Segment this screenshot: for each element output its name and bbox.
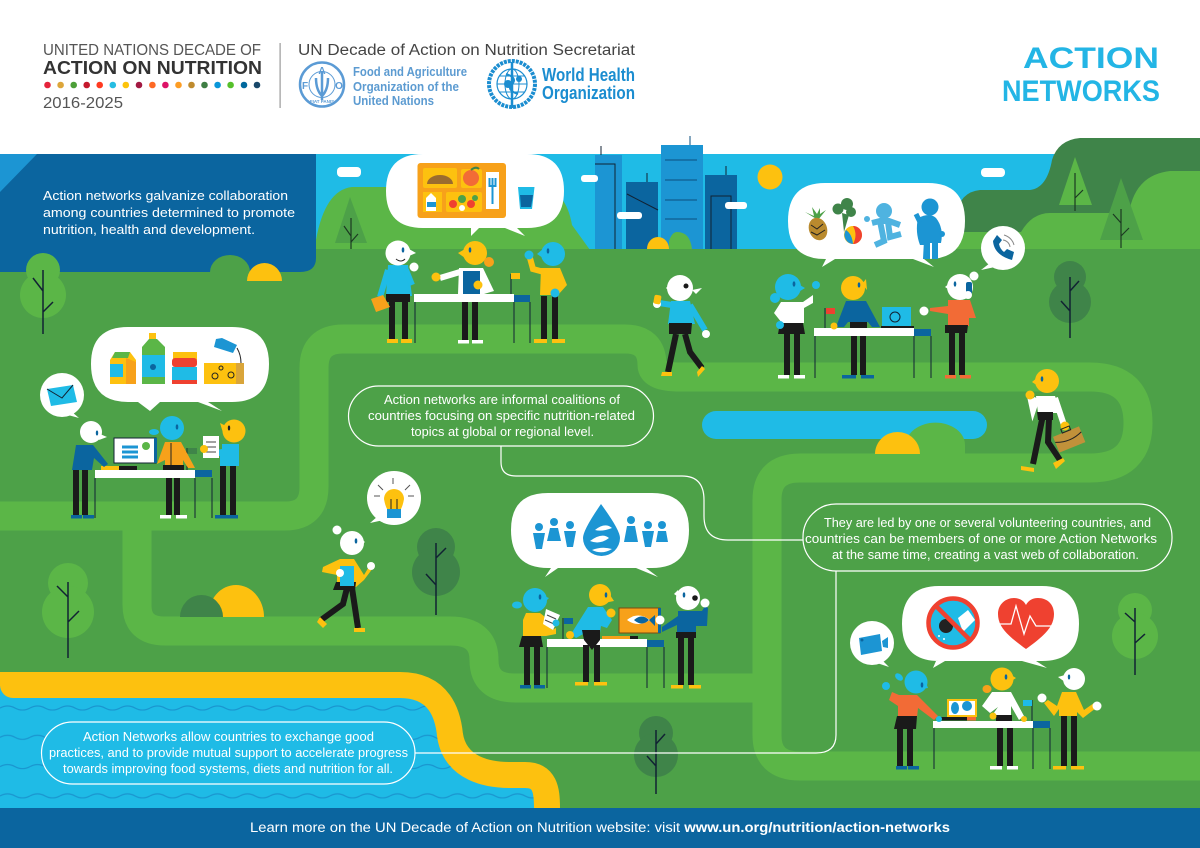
callout: informal coalitions: Action networks are informal coalitions of bbox=[384, 393, 621, 407]
hills bbox=[316, 138, 1200, 250]
FAO name bbox=[353, 65, 467, 108]
intro text: nutrition, health and development. bbox=[43, 222, 255, 237]
WHO name: World Health bbox=[542, 65, 635, 85]
intro text bbox=[43, 188, 295, 237]
river waves bbox=[0, 705, 534, 798]
FAO logo: O bbox=[335, 81, 343, 92]
callout: exchange good practices: practices, and to provide mutual support to accelerate progress bbox=[49, 745, 408, 760]
table and monitor bbox=[547, 608, 664, 688]
header: UN Decade logo bbox=[43, 42, 262, 112]
FAO name: Food and Agriculture bbox=[353, 65, 467, 79]
FAO logo: A bbox=[318, 66, 326, 77]
figure: blue head, orange shirt bbox=[882, 670, 942, 770]
speech bubble: phone call bbox=[981, 226, 1025, 270]
callout connectors bbox=[415, 446, 836, 753]
figure: yellow head, cyan shirt bbox=[200, 420, 246, 518]
callout: led by volunteering countries: countries can be members of one or more Action Networks bbox=[805, 532, 1157, 546]
round trees bbox=[20, 253, 1158, 794]
figure: blue head, yellow shirt, with paper bbox=[512, 588, 560, 688]
callout: informal coalitions: topics at global or regional level. bbox=[411, 425, 594, 439]
figure: white head, blue shirt bbox=[656, 586, 710, 688]
scene: water and fish bbox=[511, 493, 710, 688]
pond bbox=[702, 411, 987, 439]
speech bubble: email bbox=[40, 373, 84, 418]
speech bubble: lunch tray bbox=[386, 154, 564, 236]
FAO logo bbox=[300, 62, 344, 106]
WHO name: Organization bbox=[542, 83, 635, 103]
callout: led by volunteering countries: at the same time, creating a vast web of collaboration. bbox=[832, 548, 1139, 562]
panel corner bbox=[0, 154, 37, 192]
callout: led by volunteering countries: They are led by one or several volunteering countries, and bbox=[824, 516, 1151, 530]
FAO logo: F bbox=[302, 81, 308, 92]
intro text: Action networks galvanize collaboration bbox=[43, 188, 288, 203]
header: UN Decade logo: ACTION ON NUTRITION bbox=[43, 58, 262, 78]
scene: school lunch bbox=[371, 154, 567, 344]
figure: yellow head, white shirt bbox=[432, 241, 494, 344]
figure: walker with briefcase bbox=[1021, 369, 1085, 472]
speech bubble: video call bbox=[850, 621, 894, 667]
pine trees bbox=[335, 157, 1143, 250]
WHO logo bbox=[489, 61, 535, 108]
sun bbox=[758, 164, 782, 190]
sky bbox=[0, 154, 1200, 254]
speech bubble: packaged foods bbox=[91, 327, 269, 411]
bushes bbox=[180, 255, 965, 617]
title: ACTION bbox=[1023, 42, 1159, 75]
header: UN Decade logo: 2016-2025 bbox=[43, 95, 123, 112]
secretariat heading: UN Decade of Action on Nutrition Secretariat bbox=[298, 42, 636, 59]
speech bubble: lightbulb bbox=[367, 471, 421, 525]
scene: healthy diet and exercise bbox=[770, 183, 1025, 378]
figure: blue head, yellow shirt bbox=[524, 242, 567, 343]
speech bubble: water and people bbox=[511, 493, 689, 577]
winding paths bbox=[0, 339, 1200, 766]
title: NETWORKS bbox=[1002, 75, 1160, 108]
title bbox=[1002, 42, 1160, 108]
river water bbox=[0, 680, 547, 808]
table and monitor bbox=[95, 438, 212, 518]
figure: white head, yellow shirt bbox=[1038, 668, 1102, 770]
table and laptop bbox=[814, 307, 931, 378]
figure: white head, blue sweater bbox=[71, 421, 108, 518]
figure: walker with lightbulb idea bbox=[317, 471, 421, 632]
callout: informal coalitions bbox=[348, 386, 654, 446]
callout: exchange good practices: Action Networks allow countries to exchange good bbox=[83, 729, 374, 744]
footer band bbox=[0, 808, 1200, 848]
callout: informal coalitions: countries focusing on specific nutrition-related bbox=[368, 409, 635, 423]
ground bbox=[0, 249, 1200, 808]
figure: yellow head, cyan shirt bbox=[566, 584, 616, 686]
sandy bank bbox=[0, 672, 547, 808]
figure: blue head, white shirt bbox=[770, 274, 820, 378]
footer text: Learn more on the UN Decade of Action on Nutrition website: visit www.un.org/nutrition/action-networks bbox=[250, 820, 950, 835]
clouds bbox=[337, 167, 1005, 219]
buildings bbox=[595, 136, 737, 249]
figure: yellow head, white shirt bbox=[982, 668, 1027, 770]
table bbox=[414, 273, 530, 343]
header: UN Decade logo: UNITED NATIONS DECADE OF bbox=[43, 42, 261, 59]
intro text: among countries determined to promote bbox=[43, 205, 295, 220]
WHO name bbox=[542, 65, 635, 103]
FAO logo: FIAT PANIS bbox=[310, 99, 334, 104]
figure: walker with phone bbox=[653, 275, 710, 377]
callout: led by volunteering countries bbox=[803, 504, 1172, 571]
callout: exchange good practices: towards improving food systems, diets and nutrition for all. bbox=[63, 761, 393, 776]
FAO name: Organization of the bbox=[353, 80, 459, 94]
table and laptop bbox=[933, 699, 1050, 769]
scene: food labelling bbox=[40, 327, 269, 518]
dark blue intro panel bbox=[0, 154, 316, 272]
scene: salt reduction and heart health bbox=[850, 586, 1102, 770]
figure: white head, orange shirt bbox=[920, 272, 978, 378]
figure: yellow head, blue shirt bbox=[830, 276, 880, 378]
callout: exchange good practices bbox=[42, 722, 415, 784]
speech bubble: diet and activity bbox=[788, 183, 965, 267]
FAO name: United Nations bbox=[353, 94, 434, 108]
speech bubble: no salt, heart bbox=[902, 586, 1079, 668]
figure: blue head, orange shirt bbox=[149, 416, 195, 518]
figure: white head, blue shirt bbox=[371, 240, 418, 343]
